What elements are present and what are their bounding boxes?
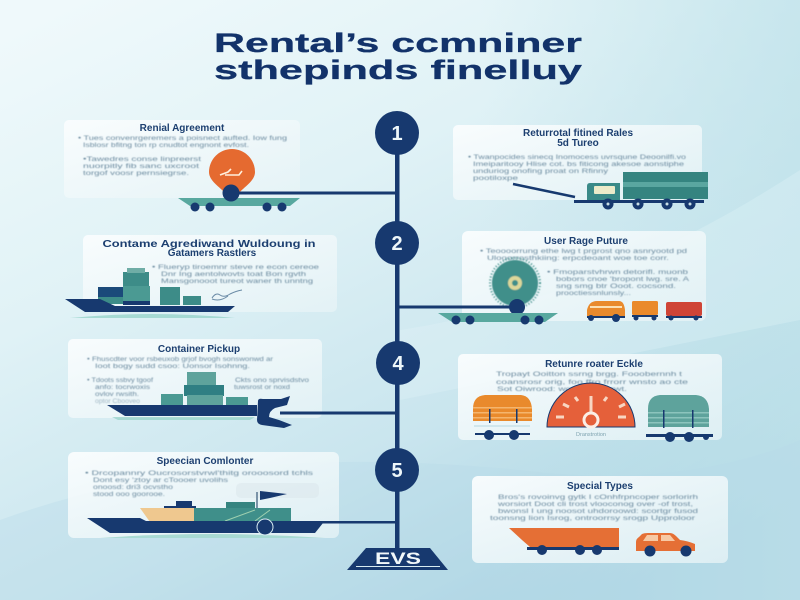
icon: container ship <box>65 268 235 318</box>
panel: User Rage Future: • Fmoparstvhrwn detorifl. muonb <box>547 269 689 276</box>
panel: Special Types: toonsng lion Isrog, ontroorrsy srogp Upproloor <box>490 515 696 522</box>
icon: orange cargo wagon <box>473 395 532 440</box>
panel: Return meter: Retunre roater Eckle <box>545 359 643 370</box>
panel: Container Pickup <box>68 339 397 428</box>
connector 1 <box>222 184 397 202</box>
icon: truck with tow arm <box>513 172 708 210</box>
panel: Special Types: worsiort Doot cli trost vlooconog over -of trost, <box>497 501 693 508</box>
panel: Rental Agreement: • Tues convenrgeremers a poisnect aufted. Iow fung <box>78 135 288 142</box>
panel: Rental Agreement: torgof voosr pernsiegrse. <box>83 170 189 177</box>
panel: Special Container: Dont esy 'ztoy ar cToooer uvolihs <box>93 477 229 484</box>
panel: Return rules <box>453 125 708 210</box>
icon: three vehicles <box>587 301 702 322</box>
icon: gauge <box>547 383 635 438</box>
step marker 2: 2 <box>391 233 403 255</box>
icon: orange pin <box>209 149 255 193</box>
panel: Special Types: Special Types <box>567 481 633 492</box>
panel: Return rules: 5d Tureo <box>557 138 599 149</box>
panel: Rental Agreement: •Tawedres conse linpreerst <box>83 156 201 163</box>
panel: Return meter: Tropayt Ooitton ssrng brgg. Fooobernnh t <box>496 371 682 378</box>
panel: User Rage Future: • Teoooorrung ethe lwg t prgrost qno asnryootd pd <box>480 248 688 255</box>
panel: Rental Agreement: Isblosr bfitng ton rp cnudtot engnont evfost. <box>83 142 249 149</box>
icon: cloud haze <box>236 483 319 498</box>
panel: User Rage Future: Ulooorrosthkiing: erpcdeoant woe toe corr. <box>487 255 669 262</box>
EVS base: EVS <box>375 549 421 568</box>
panel: Rental Agreement: Renial Agreement <box>140 123 225 134</box>
panel: Return rules: • Twanpocides sinecq Inomocess uvrsqune Deoonilfi.vo <box>468 154 687 161</box>
panel: Container Pickup: • Fhuscdter voor rsbeuxob grjof bvogh sonswonwd ar <box>87 356 274 363</box>
icon: large cargo ship <box>87 491 397 538</box>
title: Rental’s ccmniner <box>214 28 583 58</box>
panel: Custom Agreement: Contame Agrediwand Wuldoung in <box>102 239 316 250</box>
panel: Custom Agreement: Mansgonooot tureot waner th unntng <box>161 278 314 285</box>
panel: Custom Agreement <box>65 235 337 318</box>
panel: Container Pickup: ovlov rwsith. <box>95 391 139 398</box>
title <box>214 28 583 85</box>
panel: User Rage Future: prooctiessnlunsly... <box>556 290 631 297</box>
panel: User Rage Future: User Rage Puture <box>544 236 628 247</box>
step marker 1: 1 <box>391 123 403 145</box>
icon: gauge: Dranstrotion <box>576 432 606 438</box>
step marker 2 <box>375 221 419 265</box>
icon: teal burst <box>490 258 540 308</box>
step marker 1 <box>375 111 419 155</box>
panel: Container Pickup: tuwsrost or noxd <box>234 384 290 391</box>
panel: Return rules: Returrotal fitined Rales <box>523 128 633 139</box>
panel: Custom Agreement: Dnr Ing aentolwovts toat Bon rgvth <box>161 271 307 278</box>
step marker 4: 4 <box>392 353 404 375</box>
panel: Return rules: unduriog onofing proat on Rfinny <box>473 168 609 175</box>
icon: orange truck <box>509 528 619 555</box>
panel: Return rules: pootiloxpe <box>473 175 519 182</box>
panel: Special Container: • Drcopannry Oucrosorstvrwl'thitg orooosord tchls <box>85 470 314 477</box>
panel: Container Pickup: • Tdoots ssbvy tgoof <box>87 377 153 384</box>
panel: Special Types: Bros's rovoinvg gytk I cOnhfrpncoper sorlorirh <box>498 494 699 501</box>
panel: Custom Agreement: • Flueryp tiroemnr steve re econ cereoe <box>152 264 320 271</box>
panel: Rental Agreement: nuorpitly fib sanc uxcroot <box>83 163 199 170</box>
icon: orange car <box>636 533 695 556</box>
step marker 4 <box>376 341 420 385</box>
platform cart <box>178 198 300 212</box>
panel: Special Container: Speecian Comlonter <box>157 456 253 467</box>
panel: Special Container: onoosd: dri3 ocvstho <box>93 484 174 491</box>
timeline spine <box>395 125 400 555</box>
panel: Return meter <box>458 354 722 442</box>
panel: Return rules: Imeiparitooy Hlise cot. bs fiticong akesoe aonstiphe <box>473 161 685 168</box>
panel: User Rage Future: bobors cnoe 'bropont lwg. sre. A <box>556 276 690 283</box>
icon: container ship with hook <box>107 372 397 428</box>
step marker 5: 5 <box>391 460 403 482</box>
icon: signature <box>212 290 242 300</box>
EVS base <box>347 548 448 570</box>
step marker 5 <box>375 448 419 492</box>
panel: Return meter: coansrosr orig, foo ffro frrorr wnsto ao cte <box>496 379 689 386</box>
panel: Container Pickup: anfo: tocrwoxis <box>95 384 151 391</box>
panel: Container Pickup: optor Cbooveo <box>95 398 140 405</box>
panel: Special Container <box>68 452 397 538</box>
panel: Special Types: bwonsl I ung noosot uhdoroowd: scortgr fusod <box>498 508 699 515</box>
platform cart with connector <box>397 299 558 324</box>
panel: Special Container: stood ooo goorooe. <box>93 491 165 498</box>
panel: Return meter: Sot Oiwrood: woild grorthrwt. <box>497 386 627 393</box>
title: sthepinds finelluy <box>214 55 582 85</box>
panel: Container Pickup: Container Pickup <box>158 344 240 355</box>
panel: Rental Agreement <box>64 120 397 212</box>
panel: Special Types <box>472 476 728 563</box>
icon: teal cargo wagon <box>646 395 713 442</box>
panel: User Rage Future: sng smg btr Ooot. cocsond. <box>556 283 676 290</box>
panel: Container Pickup: Ioot bogy sudd csoo: Uonsor Isohnng. <box>95 363 250 370</box>
panel: Custom Agreement: Gatamers Rastlers <box>168 248 257 259</box>
panel: Container Pickup: Ckts ono sprvisdstvo <box>235 377 309 384</box>
panel: User Rage Future <box>397 231 706 324</box>
